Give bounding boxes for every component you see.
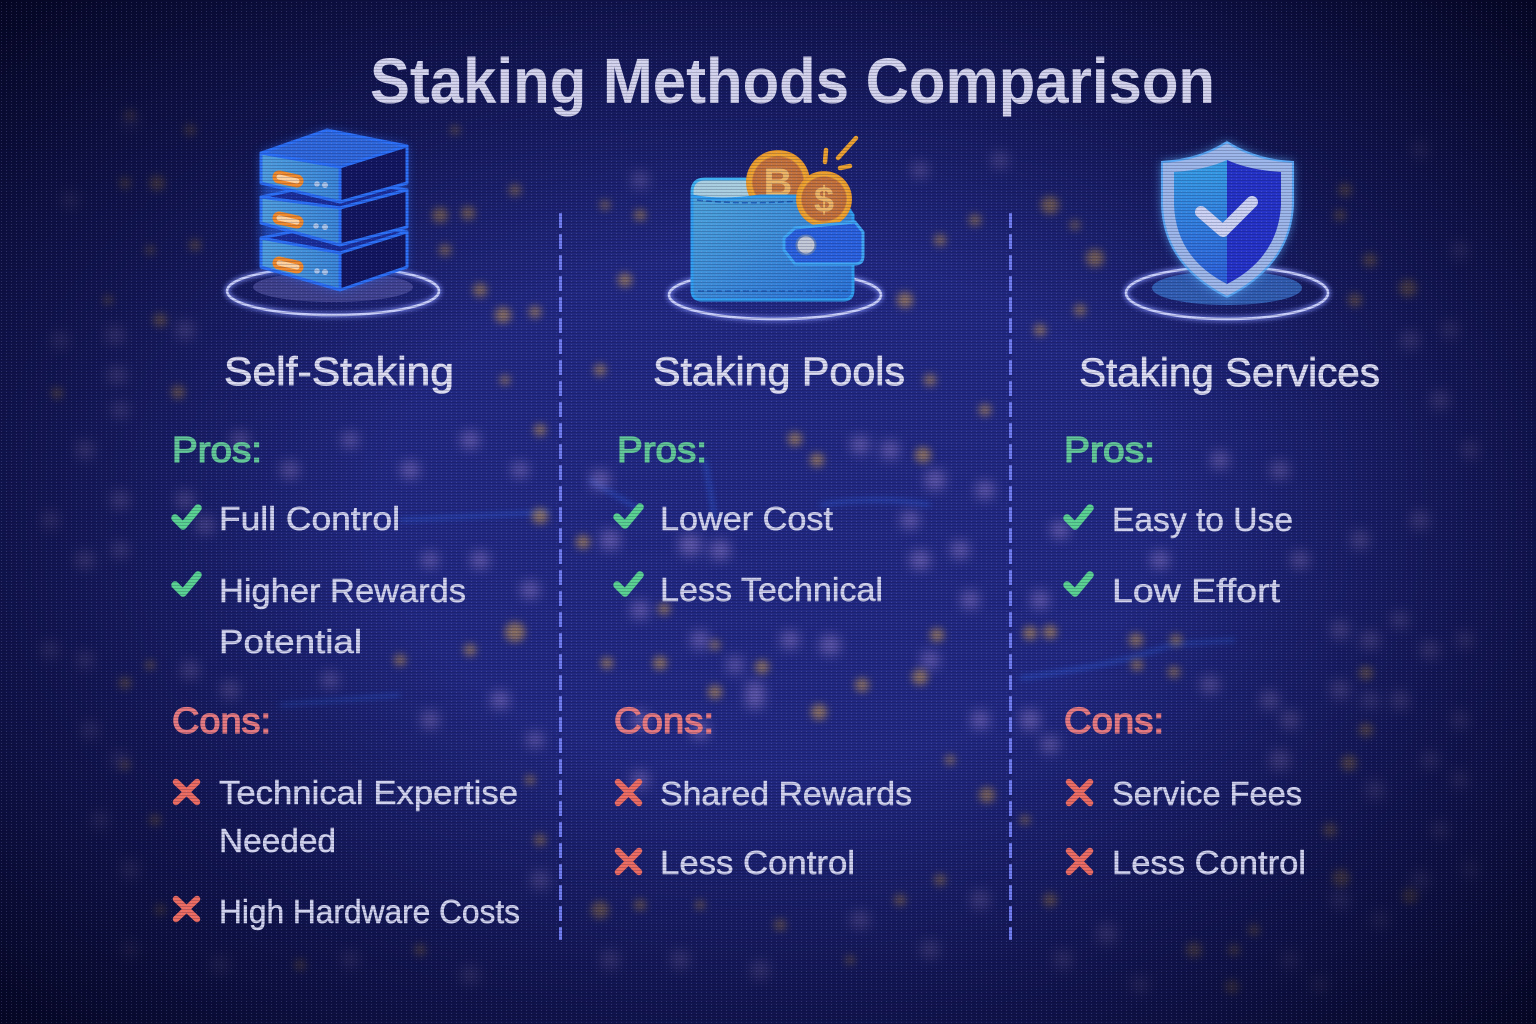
heading: pros: Pros: bbox=[617, 429, 707, 470]
text: higher rewards potential: Potential bbox=[219, 623, 362, 660]
icon: cross bbox=[618, 782, 639, 803]
text: service fees: Service Fees bbox=[1112, 775, 1302, 812]
text: technical expertise needed bbox=[219, 774, 518, 859]
text: higher rewards potential: Higher Rewards bbox=[219, 572, 466, 609]
text: high hardware costs: High Hardware Costs bbox=[219, 893, 520, 930]
icon: shield bbox=[1126, 142, 1328, 319]
icon: server stack bbox=[227, 130, 439, 315]
text: full control: Full Control bbox=[219, 500, 400, 537]
heading: cons: Cons: bbox=[614, 700, 714, 741]
heading: pros: Pros: bbox=[1064, 429, 1155, 470]
heading: staking pools: Staking Pools bbox=[653, 350, 905, 394]
divider: left bbox=[559, 213, 562, 940]
icon: check bbox=[175, 575, 198, 593]
text: easy to use: Easy to Use bbox=[1112, 501, 1293, 538]
title: Staking Methods Comparison bbox=[370, 45, 1215, 117]
coin: dollar bbox=[796, 171, 852, 227]
text: shared rewards: Shared Rewards bbox=[660, 775, 912, 812]
icon: check bbox=[1067, 575, 1090, 593]
icon: cross bbox=[618, 851, 639, 872]
text: less technical: Less Technical bbox=[660, 571, 883, 608]
icon: check bbox=[617, 507, 640, 525]
coin: bitcoin: B bbox=[764, 161, 792, 205]
icon: check bbox=[617, 575, 640, 593]
panel: self-staking bbox=[172, 130, 520, 930]
icon: wallet with coins bbox=[669, 138, 881, 319]
text: technical expertise needed: Technical Expertise bbox=[219, 774, 518, 811]
icon: cross bbox=[176, 782, 197, 802]
text: less control: Less Control bbox=[1112, 844, 1306, 881]
text: technical expertise needed: Needed bbox=[219, 822, 336, 859]
text: higher rewards potential bbox=[219, 572, 466, 660]
coin: bitcoin bbox=[746, 150, 810, 214]
heading: self-staking: Self-Staking bbox=[224, 350, 454, 394]
heading: pros: Pros: bbox=[172, 429, 262, 470]
text: less control: Less Control bbox=[660, 844, 855, 881]
panel: staking pools bbox=[614, 138, 912, 881]
icon: cross bbox=[176, 899, 197, 919]
text: low effort: Low Effort bbox=[1112, 572, 1280, 609]
heading: cons: Cons: bbox=[172, 700, 271, 741]
divider: right bbox=[1009, 213, 1012, 940]
icon: cross bbox=[1069, 782, 1090, 803]
heading: cons: Cons: bbox=[1064, 700, 1164, 741]
icon: cross bbox=[1069, 851, 1090, 872]
text: lower cost: Lower Cost bbox=[660, 500, 833, 537]
panel: staking services bbox=[1064, 142, 1380, 881]
icon: check bbox=[1067, 508, 1090, 526]
icon: check bbox=[175, 508, 198, 526]
heading: staking services: Staking Services bbox=[1079, 351, 1380, 395]
coin: dollar: $ bbox=[814, 179, 834, 220]
